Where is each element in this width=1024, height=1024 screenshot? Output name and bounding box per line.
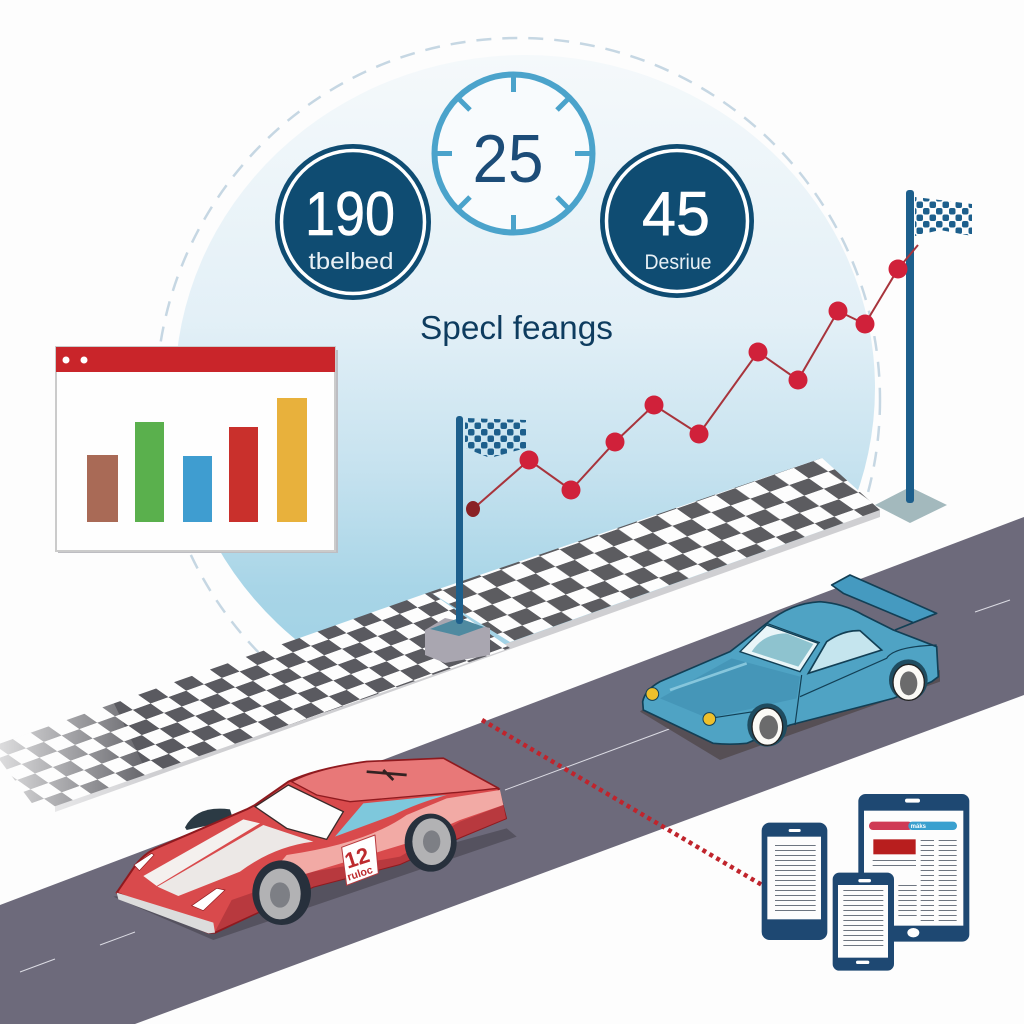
stat badge: 190: tbelbed xyxy=(308,248,394,274)
front wheel xyxy=(747,703,787,747)
left phone xyxy=(762,823,827,940)
tablet: máks xyxy=(911,824,927,830)
front wheel xyxy=(252,860,311,925)
subtitle: Specl feangs xyxy=(420,309,613,346)
stat badge: 190: 190 xyxy=(305,180,395,249)
road xyxy=(0,517,1024,1024)
red race car xyxy=(113,758,517,940)
pale blue circle backdrop xyxy=(175,55,875,721)
number plate: 12 xyxy=(342,842,373,874)
white ground below the strip xyxy=(0,465,1024,1024)
front phone xyxy=(833,873,894,971)
number plate xyxy=(342,835,378,885)
bars xyxy=(87,398,307,522)
red dotted finish line xyxy=(482,720,762,885)
rear wheel xyxy=(405,814,457,872)
dashed circle outline xyxy=(156,38,880,762)
stat badge: 45 xyxy=(600,144,754,298)
start flag xyxy=(425,416,526,663)
tablet xyxy=(858,794,969,942)
stat badge: 45: 45 xyxy=(642,180,710,249)
blue car xyxy=(640,575,940,760)
stat badge: 45: Desriue xyxy=(644,251,712,274)
devices group xyxy=(762,794,969,971)
number plate: ruloc xyxy=(346,864,374,884)
headlights xyxy=(646,688,659,700)
stat badge: 190 xyxy=(275,144,431,300)
clock dial xyxy=(434,74,592,232)
rear wheel xyxy=(889,659,928,701)
checkered strip xyxy=(0,458,880,830)
finish flag xyxy=(875,190,972,523)
browser window bar chart xyxy=(56,347,338,553)
red line chart xyxy=(466,245,918,517)
clock value: 25 xyxy=(472,121,544,197)
